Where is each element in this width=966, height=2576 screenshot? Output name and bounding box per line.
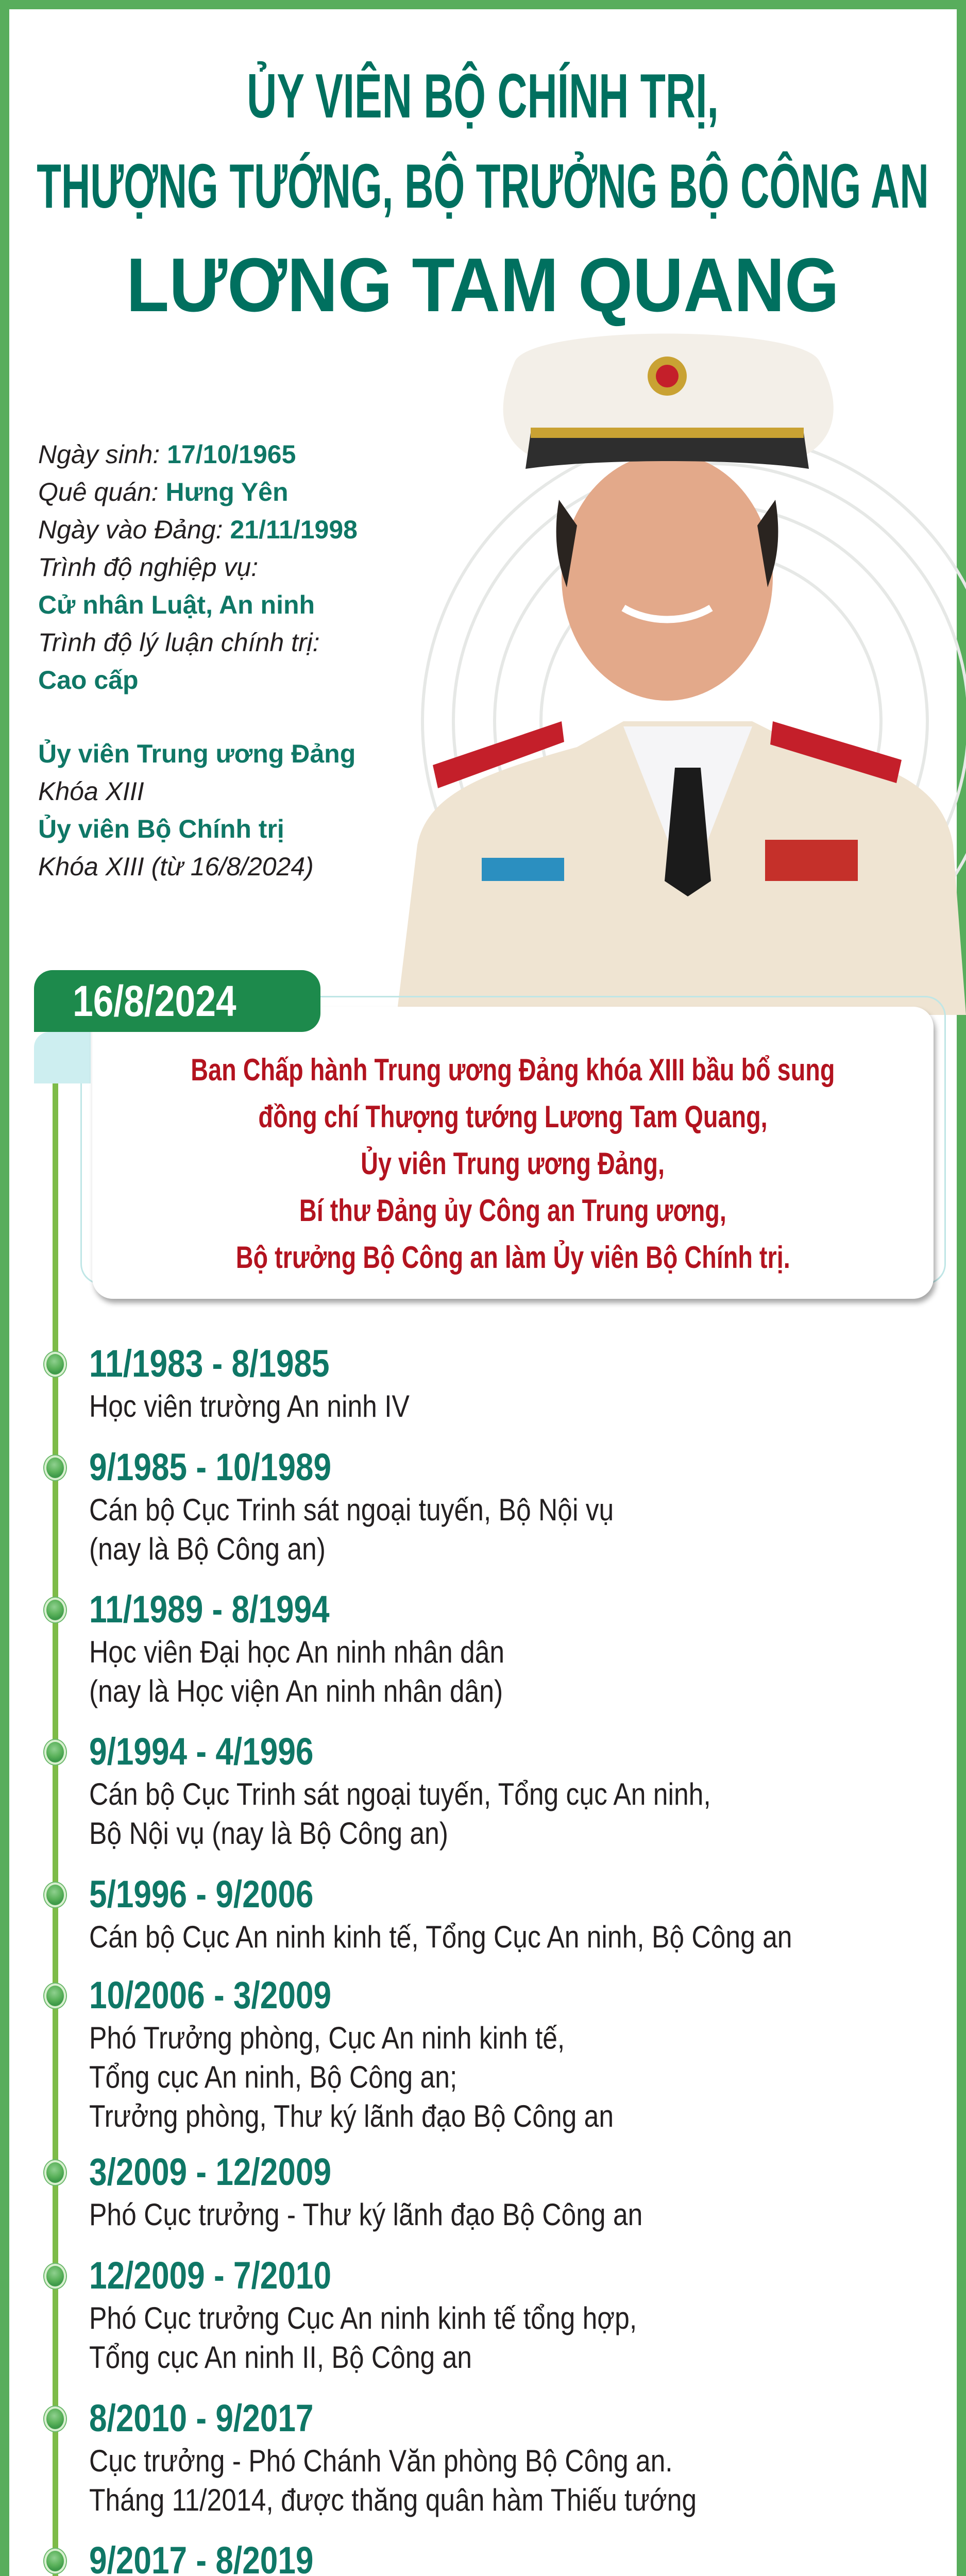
timeline item 9: Tháng 11/2014, được thăng quân hàm Thiếu tướng	[89, 2483, 697, 2517]
timeline item 1	[43, 1342, 410, 1423]
timeline item 1: Học viên trường An ninh IV	[89, 1389, 410, 1423]
personal info: Ủy viên Trung ương Đảng	[38, 739, 355, 768]
personal info: Ngày vào Đảng: 21/11/1998	[38, 515, 358, 544]
timeline item 9	[43, 2397, 697, 2517]
timeline item 3	[43, 1588, 504, 1708]
timeline item 4: Bộ Nội vụ (nay là Bộ Công an)	[89, 1816, 448, 1851]
timeline item 8: Tổng cục An ninh II, Bộ Công an	[89, 2340, 472, 2375]
timeline item 1: 11/1983 - 8/1985	[89, 1342, 330, 1385]
timeline item 8: Phó Cục trưởng Cục An ninh kinh tế tổng hợp,	[89, 2301, 637, 2335]
timeline item 5: Cán bộ Cục An ninh kinh tế, Tổng Cục An ninh, Bộ Công an	[89, 1920, 792, 1954]
date tab: 16/8/2024	[73, 977, 236, 1025]
timeline item 8: 12/2009 - 7/2010	[89, 2254, 331, 2297]
timeline item 6: Trưởng phòng, Thư ký lãnh đạo Bộ Công an	[89, 2099, 614, 2133]
timeline item 5	[43, 1873, 792, 1954]
timeline item 4: Cán bộ Cục Trinh sát ngoại tuyến, Tổng cục An ninh,	[89, 1777, 711, 1811]
timeline item 3: (nay là Học viện An ninh nhân dân)	[89, 1674, 503, 1708]
personal info: Trình độ nghiệp vụ:	[38, 553, 258, 582]
highlight text: Ủy viên Trung ương Đảng,	[361, 1146, 665, 1181]
highlight text: Bí thư Đảng ủy Công an Trung ương,	[299, 1193, 726, 1228]
timeline item 9: Cục trưởng - Phó Chánh Văn phòng Bộ Công an.	[89, 2444, 673, 2478]
highlight text: Bộ trưởng Bộ Công an làm Ủy viên Bộ Chính trị.	[236, 1240, 790, 1275]
timeline item 6	[43, 1974, 614, 2133]
personal info: Cử nhân Luật, An ninh	[38, 590, 315, 619]
date tab	[34, 970, 320, 1032]
highlight text	[191, 1053, 835, 1275]
timeline item 9: 8/2010 - 9/2017	[89, 2397, 313, 2439]
timeline item 6: Phó Trưởng phòng, Cục An ninh kinh tế,	[89, 2021, 565, 2055]
highlight text: đồng chí Thượng tướng Lương Tam Quang,	[258, 1099, 768, 1134]
portrait photo	[398, 334, 966, 1015]
timeline item 2: (nay là Bộ Công an)	[89, 1532, 326, 1566]
personal info: Ngày sinh: 17/10/1965	[38, 440, 296, 469]
title	[37, 61, 929, 328]
highlight box 16/8/2024	[34, 970, 946, 1307]
title: THƯỢNG TƯỚNG, BỘ TRƯỞNG BỘ CÔNG AN	[37, 151, 929, 221]
highlight text: Ban Chấp hành Trung ương Đảng khóa XIII bầu bổ sung	[191, 1053, 835, 1087]
timeline item 6: 10/2006 - 3/2009	[89, 1974, 331, 2016]
personal info: Ủy viên Bộ Chính trị	[38, 815, 284, 843]
personal info: Khóa XIII	[38, 777, 144, 806]
timeline item 7	[43, 2150, 642, 2232]
timeline item 4	[43, 1730, 711, 1851]
personal info	[38, 440, 358, 881]
timeline item 7: Phó Cục trưởng - Thư ký lãnh đạo Bộ Công an	[89, 2197, 642, 2232]
personal info: Khóa XIII (từ 16/8/2024)	[38, 852, 314, 881]
title: ỦY VIÊN BỘ CHÍNH TRỊ,	[247, 61, 719, 131]
timeline item 8	[43, 2254, 637, 2375]
timeline line	[53, 1030, 58, 2576]
timeline item 5: 5/1996 - 9/2006	[89, 1873, 313, 1916]
timeline item 2: 9/1985 - 10/1989	[89, 1446, 331, 1488]
title: LƯƠNG TAM QUANG	[126, 243, 839, 328]
timeline item 2	[43, 1446, 614, 1566]
timeline item 3: Học viên Đại học An ninh nhân dân	[89, 1635, 504, 1669]
timeline item 2: Cán bộ Cục Trinh sát ngoại tuyến, Bộ Nội vụ	[89, 1493, 614, 1527]
timeline item 3: 11/1989 - 8/1994	[89, 1588, 330, 1631]
timeline item 7: 3/2009 - 12/2009	[89, 2150, 331, 2193]
timeline item 6: Tổng cục An ninh, Bộ Công an;	[89, 2060, 457, 2094]
personal info: Cao cấp	[38, 666, 139, 694]
personal info: Trình độ lý luận chính trị:	[38, 628, 320, 657]
personal info: Quê quán: Hưng Yên	[38, 478, 289, 506]
timeline item 4: 9/1994 - 4/1996	[89, 1730, 313, 1773]
